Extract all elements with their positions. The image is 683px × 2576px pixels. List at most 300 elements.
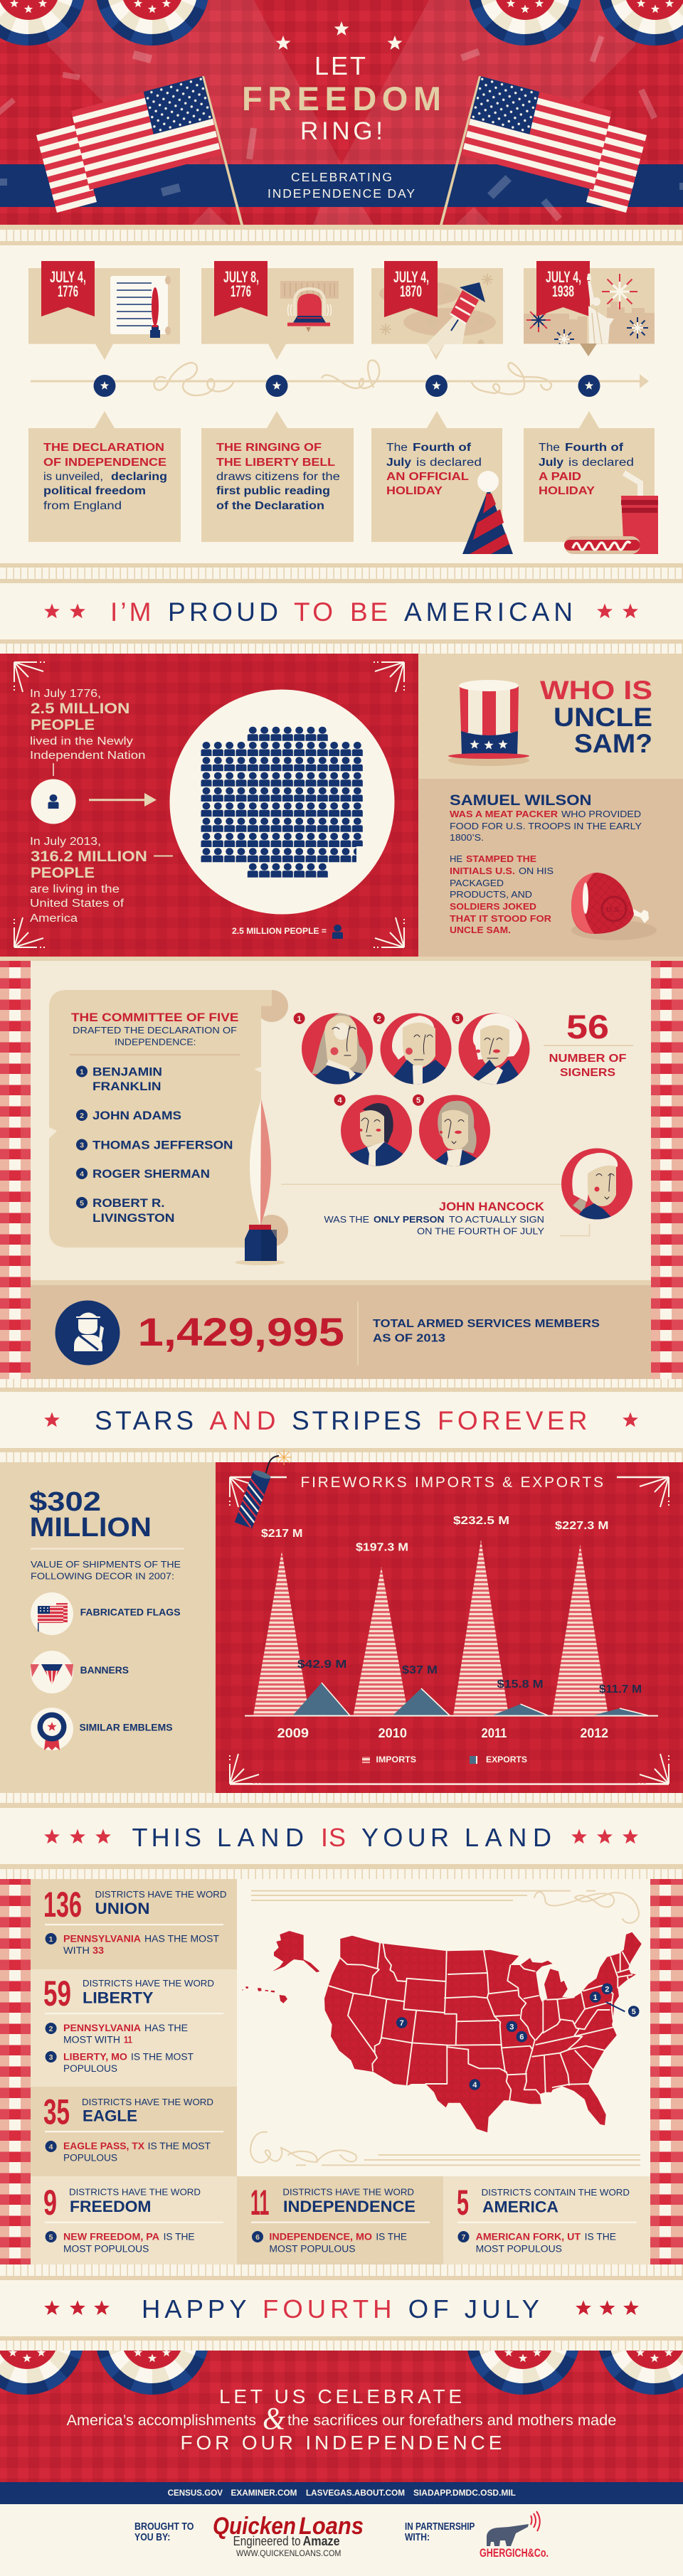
ribbon: July 4, 1938 (536, 261, 590, 316)
John Hancock: ONLY PERSON (374, 1214, 444, 1225)
card: America (457, 2183, 637, 2254)
card: America: 7 (462, 2233, 466, 2242)
credit: Quicken Loans: WWW.QUICKENLOANS.COM (236, 2548, 341, 2558)
card: Independence: 6 (255, 2233, 260, 2242)
map markers: 1 (593, 1994, 598, 2002)
heading: I'm proud to be American: PROUD (168, 597, 278, 627)
text card 3: is declared (416, 457, 482, 469)
closing message: & (263, 2401, 286, 2436)
card: Eagle: EAGLE (83, 2107, 137, 2125)
stat: $302 (29, 1487, 101, 1517)
map markers: 6 (519, 2033, 524, 2042)
1776 population text: Independent Nation (30, 750, 145, 762)
icon: quill and ink (235, 1100, 285, 1265)
card: Liberty: PENNSYLVANIA (63, 2023, 141, 2033)
committee list: ROGER SHERMAN (92, 1168, 210, 1181)
card 2 top (201, 261, 354, 360)
card: Union: PENNSYLVANIA (63, 1933, 141, 1944)
text card 2: of the Declaration (216, 500, 324, 512)
text card 4 (524, 411, 655, 542)
text card 1: OF INDEPENDENCE (43, 457, 166, 469)
map markers: 2 (605, 1985, 609, 1994)
2013 population text: In July 2013, (30, 836, 101, 848)
sources bar: SIADAPP.DMDC.OSD.MIL (413, 2489, 516, 2498)
triangle chart: $197.3 M (356, 1542, 408, 1553)
committee list: 2 (80, 1112, 84, 1120)
triangle chart: $42.9 M (297, 1659, 346, 1671)
credit: Ghergich: WITH: (405, 2531, 430, 2543)
1776 population text: PEOPLE (31, 717, 95, 733)
chart legend: EXPORTS (486, 1756, 527, 1765)
card: America: AMERICAN FORK, UT (476, 2232, 581, 2242)
icon: flags (31, 1592, 73, 1635)
armed services stat: TOTAL ARMED SERVICES MEMBERS (373, 1318, 600, 1330)
card: Independence: INDEPENDENCE, MO (269, 2232, 372, 2242)
committee list: ROBERT R. (92, 1197, 165, 1210)
2013 population text: 316.2 MILLION (31, 848, 147, 865)
portrait 2: John Adams (374, 1013, 451, 1088)
label 1: 1 (297, 1015, 302, 1023)
armed services stat: AS OF 2013 (373, 1333, 445, 1344)
text card 2 (201, 411, 354, 542)
John Hancock: JOHN HANCOCK (439, 1201, 544, 1213)
heading (540, 676, 652, 758)
card 4 top (524, 261, 655, 356)
confetti (0, 36, 683, 221)
icon: rocket (379, 274, 496, 356)
map markers: 5 (632, 2008, 636, 2016)
committee list: 1 (80, 1068, 84, 1077)
triangle chart: $37 M (402, 1664, 438, 1676)
heading: this land is your land: IS (321, 1823, 346, 1852)
card: Freedom (43, 2183, 223, 2254)
portrait 1: Benjamin Franklin (294, 1013, 373, 1088)
heading: happy fourth of July: FOURTH (263, 2294, 391, 2324)
committee heading (70, 1011, 240, 1055)
icon: elephant (487, 2511, 540, 2546)
card 1 top (28, 261, 180, 360)
committee list: FRANKLIN (92, 1080, 161, 1093)
committee list (76, 1065, 233, 1225)
card: Liberty: LIBERTY (83, 1989, 154, 2006)
Samuel Wilson text: SAMUEL WILSON (450, 792, 592, 809)
label 3: 3 (455, 1015, 460, 1023)
Samuel Wilson text: THAT IT STOOD FOR (450, 913, 551, 924)
map markers: 4 (472, 2081, 477, 2090)
timeline axis (31, 360, 649, 395)
sources bar: LASVEGAS.ABOUT.COM (306, 2489, 405, 2498)
card: Independence: 11 (250, 2183, 269, 2223)
credit: Quicken Loans: Loans (299, 2513, 364, 2540)
heading: stars and stripes forever: STRIPES (292, 1406, 421, 1435)
credit: Quicken Loans (134, 2513, 364, 2558)
heading: stars and stripes forever: FOREVER (438, 1406, 588, 1435)
card: Eagle: POPULOUS (63, 2153, 117, 2163)
card: Eagle: 35 (43, 2092, 70, 2131)
portrait: John Hancock (561, 1148, 632, 1219)
credit: Quicken Loans: BROUGHT TO (134, 2521, 194, 2533)
committee list: 5 (80, 1199, 84, 1208)
arrow (89, 793, 157, 807)
title: FREEDOM (242, 80, 441, 117)
text card 3: HOLIDAY (386, 485, 443, 497)
armed services stat (55, 1300, 600, 1366)
panel: fireworks chart (216, 1449, 683, 1793)
text card 1: political freedom (43, 485, 146, 497)
closing message: LET US CELEBRATE (219, 2385, 462, 2407)
card: Freedom: NEW FREEDOM, PA (63, 2232, 159, 2242)
heading: stars and stripes forever (44, 1406, 638, 1435)
heading: I'm proud to be American (44, 597, 638, 627)
ribbon: July 4, 1776: JULY 4, (50, 268, 86, 286)
timeline panel (28, 261, 658, 554)
icon: liberty bell (280, 281, 339, 332)
portrait 3: Thomas Jefferson (452, 1013, 529, 1088)
card: Freedom: FREEDOM (70, 2198, 151, 2215)
ribbon: July 4, 1870: JULY 4, (393, 268, 429, 286)
text card 4: July (539, 457, 563, 469)
legend: person: 2.5 MILLION PEOPLE = (232, 926, 327, 936)
panel: committee background (0, 957, 683, 1379)
Samuel Wilson text: FOOD FOR U.S. TROOPS IN THE EARLY (450, 821, 642, 831)
card 3 top (371, 261, 503, 360)
heading: WHO IS (540, 676, 652, 705)
card: Independence: DISTRICTS HAVE THE WORD (282, 2187, 414, 2198)
label 4: 4 (338, 1097, 343, 1105)
card: Eagle: DISTRICTS HAVE THE WORD (82, 2097, 213, 2107)
Alaska (272, 1931, 319, 1972)
stat: VALUE OF SHIPMENTS OF THE (31, 1559, 181, 1570)
signers stat: NUMBER OF (549, 1053, 626, 1065)
ribbon: July 4, 1870 (384, 261, 438, 317)
ribbon: July 4, 1776 (41, 261, 95, 316)
Samuel Wilson text: PACKAGED (450, 878, 504, 888)
card: Liberty: MOST WITH (63, 2035, 120, 2045)
stat: MILLION (30, 1513, 152, 1543)
text card 4: HOLIDAY (539, 485, 595, 497)
map markers (396, 1983, 639, 2090)
ribbon: July 8, 1776 (214, 261, 268, 316)
small population circle (31, 763, 75, 824)
stat: FOLLOWING DECOR IN 2007: (31, 1570, 174, 1582)
closing message: FOR OUR INDEPENDENCE (181, 2432, 502, 2454)
triangle chart: $15.8 M (497, 1678, 544, 1691)
card: Freedom: MOST POPULOUS (63, 2243, 149, 2254)
text card 1: from England (43, 500, 122, 512)
Samuel Wilson text: PRODUCTS, AND (450, 889, 532, 900)
2013 population text: are living in the (30, 883, 120, 895)
US map (242, 1931, 642, 2132)
card: America: MOST POPULOUS (476, 2243, 562, 2254)
icon: statue of liberty (580, 273, 614, 356)
triangle chart: 2010 (378, 1726, 407, 1740)
2013 population text (30, 836, 173, 925)
heading: stars and stripes forever: STARS (95, 1406, 194, 1435)
heading: I'm proud to be American: TO (294, 597, 333, 627)
icon: drink and hot dog (564, 473, 658, 554)
card: Liberty: 2 (49, 2025, 53, 2033)
icon: soldier (55, 1300, 120, 1366)
card: Union: WITH (63, 1945, 90, 1956)
card: Union: UNION (95, 1900, 149, 1917)
card: Union: 136 (43, 1885, 82, 1925)
ribbon: July 4, 1938: 1938 (552, 282, 574, 300)
1776 population text (30, 688, 145, 762)
card: Liberty: POPULOUS (63, 2063, 117, 2074)
Samuel Wilson text: ON HIS (519, 866, 554, 876)
header banner (0, 0, 683, 225)
heading: this land is your land (44, 1823, 638, 1852)
card: Independence: IS THE (376, 2232, 407, 2242)
card: Liberty: 59 (43, 1974, 71, 2013)
icon: ham (571, 873, 657, 940)
map ornaments (250, 1891, 640, 2165)
text card 2: THE RINGING OF (216, 442, 322, 454)
panel: decor shipments: BANNERS (80, 1665, 129, 1676)
armed services stat: 1,429,995 (138, 1309, 344, 1354)
1776 population text: lived in the Newly (30, 735, 133, 747)
card: Liberty: LIBERTY, MO (63, 2052, 127, 2063)
subtitle: CELEBRATING (291, 170, 392, 184)
card: Union: DISTRICTS HAVE THE WORD (95, 1889, 226, 1900)
card: America: IS THE (585, 2232, 616, 2242)
sources bar: EXAMINER.COM (231, 2489, 297, 2498)
heading: happy fourth of July (44, 2294, 639, 2324)
ribbon: July 4, 1938: JULY 4, (546, 268, 581, 286)
signers stat: 56 (566, 1008, 609, 1045)
subtitle: INDEPENDENCE DAY (268, 186, 415, 201)
text card 1: is unveiled, (43, 471, 103, 483)
heading: this land is your land: LAND (217, 1823, 304, 1852)
closing message (67, 2385, 616, 2454)
card: Freedom: IS THE (164, 2232, 195, 2242)
sources bar (0, 2482, 683, 2504)
committee list: JOHN ADAMS (92, 1109, 181, 1122)
icon: banners (31, 1651, 73, 1693)
card: Eagle: EAGLE PASS, TX (63, 2141, 144, 2151)
icon: skyline and fireworks (524, 274, 655, 349)
contiguous states (324, 1932, 642, 2132)
ribbon: July 4, 1776: 1776 (58, 282, 78, 300)
credit: Quicken Loans: YOU BY: (134, 2531, 170, 2543)
card: Freedom: 5 (49, 2233, 53, 2242)
sources bar: CENSUS.GOV (168, 2489, 223, 2498)
card: Freedom: 9 (43, 2183, 57, 2223)
card: Freedom: DISTRICTS HAVE THE WORD (69, 2187, 201, 2198)
credit: Ghergich: GHERGICH&Co. (480, 2546, 549, 2560)
heading: happy fourth of July: JULY (465, 2294, 539, 2324)
triangle chart: $11.7 M (599, 1683, 642, 1696)
Samuel Wilson text: HE (450, 853, 462, 864)
committee list: LIVINGSTON (92, 1212, 175, 1225)
text card 3: Fourth of (413, 442, 472, 454)
panel: decor shipments: FABRICATED FLAGS (80, 1607, 181, 1617)
card: Liberty: IS THE MOST (131, 2052, 194, 2063)
text card 3 (371, 411, 502, 542)
text card 2: first public reading (216, 485, 330, 497)
footer banner (0, 2351, 683, 2482)
heading: UNCLE (554, 703, 652, 732)
label 5: 5 (416, 1097, 420, 1105)
legend: person (232, 925, 343, 939)
heading: this land is your land: LAND (465, 1823, 551, 1852)
bunting top (0, 0, 683, 46)
right flag (440, 76, 647, 225)
subtitle (268, 170, 415, 201)
Hawaii (242, 1986, 287, 2003)
icon: ham: U.S. (606, 906, 622, 914)
bunting bottom (0, 2351, 683, 2395)
committee list: BENJAMIN (92, 1065, 162, 1078)
committee list: 3 (80, 1141, 84, 1149)
text card 1: THE DECLARATION (43, 442, 164, 454)
closing message: the sacrifices our forefathers and mothers made (287, 2412, 616, 2429)
card: Eagle (31, 2087, 237, 2176)
credit: Ghergich (405, 2511, 549, 2560)
icon: declaration scroll (110, 276, 171, 338)
text card 1: declaring (111, 471, 167, 483)
text card 4: is declared (568, 457, 634, 469)
card: America: 5 (457, 2183, 469, 2223)
Samuel Wilson text (450, 792, 642, 935)
ribbon: July 8, 1776: JULY 8, (223, 268, 259, 286)
card: Liberty: 3 (49, 2053, 53, 2062)
2013 population text: America (30, 912, 78, 925)
triangle chart: $217 M (261, 1528, 303, 1540)
Samuel Wilson text: WHO PROVIDED (561, 809, 641, 819)
header stars (276, 21, 402, 50)
text card 3: The (386, 442, 408, 454)
credit: Quicken Loans: Amaze (303, 2534, 340, 2548)
map markers: 7 (400, 2019, 404, 2028)
portrait 4: Roger Sherman (334, 1095, 412, 1170)
text card 4: The (539, 442, 560, 454)
ribbon: July 4, 1870: 1870 (400, 282, 422, 300)
card: America: DISTRICTS CONTAIN THE WORD (482, 2187, 630, 2198)
triangle chart (245, 1515, 658, 1740)
credit: Ghergich: IN PARTNERSHIP (405, 2521, 475, 2533)
text card 2: draws citizens for the (216, 471, 340, 483)
John Hancock (282, 1148, 632, 1236)
card: Union: 33 (92, 1945, 105, 1956)
chart frame (230, 1477, 669, 1784)
Samuel Wilson text: 1800’S. (450, 832, 484, 843)
panel: decor shipments (0, 1462, 216, 1793)
2013 population text: PEOPLE (31, 865, 95, 881)
committee list: 4 (80, 1170, 84, 1178)
timeline markers (94, 375, 600, 397)
heading: this land is your land: YOUR (361, 1823, 449, 1852)
heading: happy fourth of July: HAPPY (142, 2294, 247, 2324)
card: Liberty: HAS THE (144, 2023, 188, 2033)
heading: SAM? (574, 729, 652, 758)
committee heading: DRAFTED THE DECLARATION OF (73, 1025, 237, 1036)
committee list: THOMAS JEFFERSON (92, 1139, 233, 1152)
triangle chart: $227.3 M (555, 1520, 608, 1532)
card: Liberty: 11 (124, 2035, 132, 2045)
heading: I'm proud to be American: I’M (110, 597, 151, 627)
panel: population (0, 654, 418, 957)
corner ornaments (14, 662, 404, 947)
text card 3: AN OFFICIAL (386, 471, 469, 483)
John Hancock: TO ACTUALLY SIGN (449, 1214, 544, 1225)
heading: I'm proud to be American: BE (350, 597, 388, 627)
icon: emblem (31, 1708, 73, 1750)
text card 3: July (386, 457, 411, 469)
icon: party hat (462, 471, 513, 554)
label 2: 2 (377, 1015, 381, 1023)
card: Liberty (31, 1969, 237, 2087)
portrait 5: Robert R. Livingston (413, 1095, 490, 1170)
ribbon: July 8, 1776: 1776 (231, 282, 251, 300)
1776 population text: In July 1776, (30, 688, 101, 700)
card: Union (31, 1879, 237, 1969)
Samuel Wilson text: INITIALS U.S. (450, 866, 515, 876)
large population circle (169, 690, 394, 915)
text card 1 (28, 411, 181, 542)
scroll: committee of five (49, 990, 288, 1265)
card: America: AMERICA (482, 2198, 558, 2216)
icon: firecracker (235, 1449, 292, 1528)
card: Independence: MOST POPULOUS (269, 2243, 356, 2254)
card: Independence: INDEPENDENCE (283, 2198, 415, 2215)
card: Union: HAS THE MOST (144, 1933, 219, 1944)
heading: happy fourth of July: OF (408, 2294, 449, 2324)
Samuel Wilson text: UNCLE SAM. (450, 925, 511, 935)
chart legend: IMPORTS (376, 1756, 416, 1765)
signers stat: SIGNERS (560, 1067, 615, 1079)
closing message: America’s accomplishments (67, 2412, 256, 2429)
card: Union: 1 (49, 1935, 53, 1944)
credit: Quicken Loans: Engineered to (233, 2534, 301, 2548)
heading: I'm proud to be American: AMERICAN (404, 597, 573, 627)
left flag (36, 76, 243, 225)
triangle chart: 2009 (277, 1726, 309, 1740)
card: Liberty: DISTRICTS HAVE THE WORD (83, 1978, 214, 1989)
Samuel Wilson text: WAS A MEAT PACKER (450, 809, 558, 819)
Samuel Wilson text: STAMPED THE (466, 853, 537, 864)
triangle chart: 2011 (481, 1726, 507, 1740)
heading: stars and stripes forever: AND (209, 1406, 276, 1435)
committee heading: INDEPENDENCE: (115, 1037, 196, 1047)
heading: this land is your land: THIS (132, 1823, 201, 1852)
triangle chart: 2012 (581, 1726, 608, 1740)
chart legend (362, 1756, 527, 1765)
panel: decor shipments: SIMILAR EMBLEMS (80, 1723, 172, 1733)
text card 2: THE LIBERTY BELL (216, 457, 335, 469)
title (242, 51, 441, 145)
text card 4: Fourth of (565, 442, 624, 454)
triangle chart: $232.5 M (453, 1515, 509, 1527)
committee heading: THE COMMITTEE OF FIVE (71, 1011, 239, 1024)
credit: Quicken Loans: Quicken (213, 2513, 296, 2540)
1776 population text: 2.5 MILLION (31, 701, 129, 717)
title: LET (314, 51, 366, 80)
Samuel Wilson text: SOLDIERS JOKED (450, 901, 536, 912)
John Hancock: ON THE FOURTH OF JULY (417, 1226, 544, 1236)
icon: Uncle Sam hat (448, 680, 529, 766)
2013 population text: United States of (30, 898, 125, 910)
card: Eagle: 4 (49, 2143, 53, 2151)
signers stat (544, 1008, 633, 1079)
text card 4: A PAID (539, 471, 581, 483)
stat (29, 1487, 184, 1582)
panel: district stats background (0, 1879, 683, 2264)
chart title: FIREWORKS IMPORTS & EXPORTS (300, 1474, 603, 1491)
card: Independence (250, 2183, 430, 2254)
panel: who is Uncle Sam (418, 654, 683, 957)
map markers: 3 (509, 2023, 514, 2031)
